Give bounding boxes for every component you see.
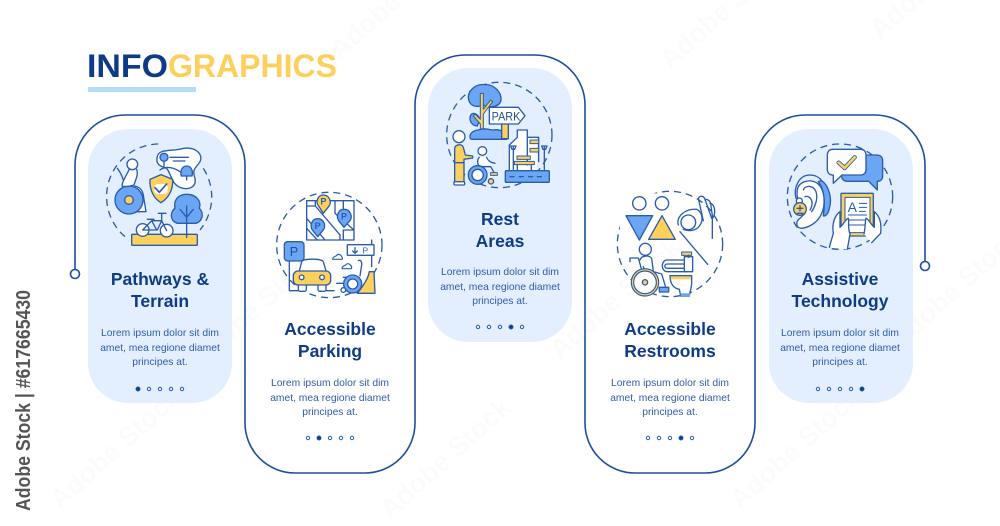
- heading: Assistive: [802, 269, 879, 289]
- progress dots: [816, 387, 864, 391]
- title: [87, 48, 337, 84]
- icon: parking map, car, wheelchair: P: [315, 221, 321, 231]
- icon: parking map, car, wheelchair: [277, 192, 382, 298]
- panel: assistive technology: [769, 129, 913, 403]
- panel: rest areas: [428, 68, 572, 342]
- connector end dot: [920, 262, 930, 270]
- icon: park sign, tree, carer with wheelchair, bench: PARK: [492, 110, 520, 124]
- title: INFO: [87, 48, 168, 84]
- description: principes at.: [472, 296, 528, 307]
- heading: Terrain: [131, 291, 189, 311]
- heading: Pathways &: [111, 269, 209, 289]
- connector outline: [75, 55, 925, 473]
- panel: pathways and terrain: [88, 129, 232, 403]
- description: Lorem ipsum dolor sit dim: [101, 328, 219, 339]
- description: amet, mea regione diamet: [440, 282, 560, 293]
- title underline: [88, 87, 196, 92]
- heading: Accessible: [284, 319, 376, 339]
- stock credit: Adobe Stock | #617665430: [13, 290, 35, 511]
- icon: parking map, car, wheelchair: P: [320, 197, 326, 207]
- description: principes at.: [642, 407, 698, 418]
- description: principes at.: [132, 357, 188, 368]
- progress dots: [646, 436, 694, 440]
- description: Lorem ipsum dolor sit dim: [611, 378, 729, 389]
- heading: Areas: [476, 231, 525, 251]
- description: amet, mea regione diamet: [780, 343, 900, 354]
- description: Lorem ipsum dolor sit dim: [781, 328, 899, 339]
- description: principes at.: [302, 407, 358, 418]
- heading: Rest: [481, 209, 519, 229]
- title: GRAPHICS: [168, 48, 337, 84]
- heading: Parking: [298, 341, 362, 361]
- heading: Technology: [792, 291, 889, 311]
- description: amet, mea regione diamet: [610, 393, 730, 404]
- icon: speech bubbles, hearing aid, tablet: A: [848, 199, 858, 215]
- description: amet, mea regione diamet: [270, 393, 390, 404]
- description: Lorem ipsum dolor sit dim: [441, 267, 559, 278]
- description: amet, mea regione diamet: [100, 343, 220, 354]
- progress dots: [306, 436, 354, 440]
- panel: accessible restrooms: [610, 191, 730, 440]
- description: principes at.: [812, 357, 868, 368]
- description: Lorem ipsum dolor sit dim: [271, 378, 389, 389]
- progress dots: [476, 325, 524, 329]
- heading: Accessible: [624, 319, 716, 339]
- icon: park sign, tree, carer with wheelchair, bench: [447, 82, 552, 188]
- icon: parking map, car, wheelchair: P: [362, 245, 368, 255]
- icon: wheelchair, map, shield, bicycle, tree: [107, 144, 212, 245]
- progress dots: [136, 387, 184, 391]
- panel: accessible parking: [270, 192, 390, 440]
- heading: Restrooms: [624, 341, 716, 361]
- icon: speech bubbles, hearing aid, tablet: [787, 144, 893, 249]
- icon: restroom symbols, hand, wheelchair, toilet: [617, 191, 723, 297]
- icon: parking map, car, wheelchair: P: [341, 212, 347, 222]
- icon: parking map, car, wheelchair: P: [290, 245, 298, 259]
- connector start dot: [70, 270, 80, 278]
